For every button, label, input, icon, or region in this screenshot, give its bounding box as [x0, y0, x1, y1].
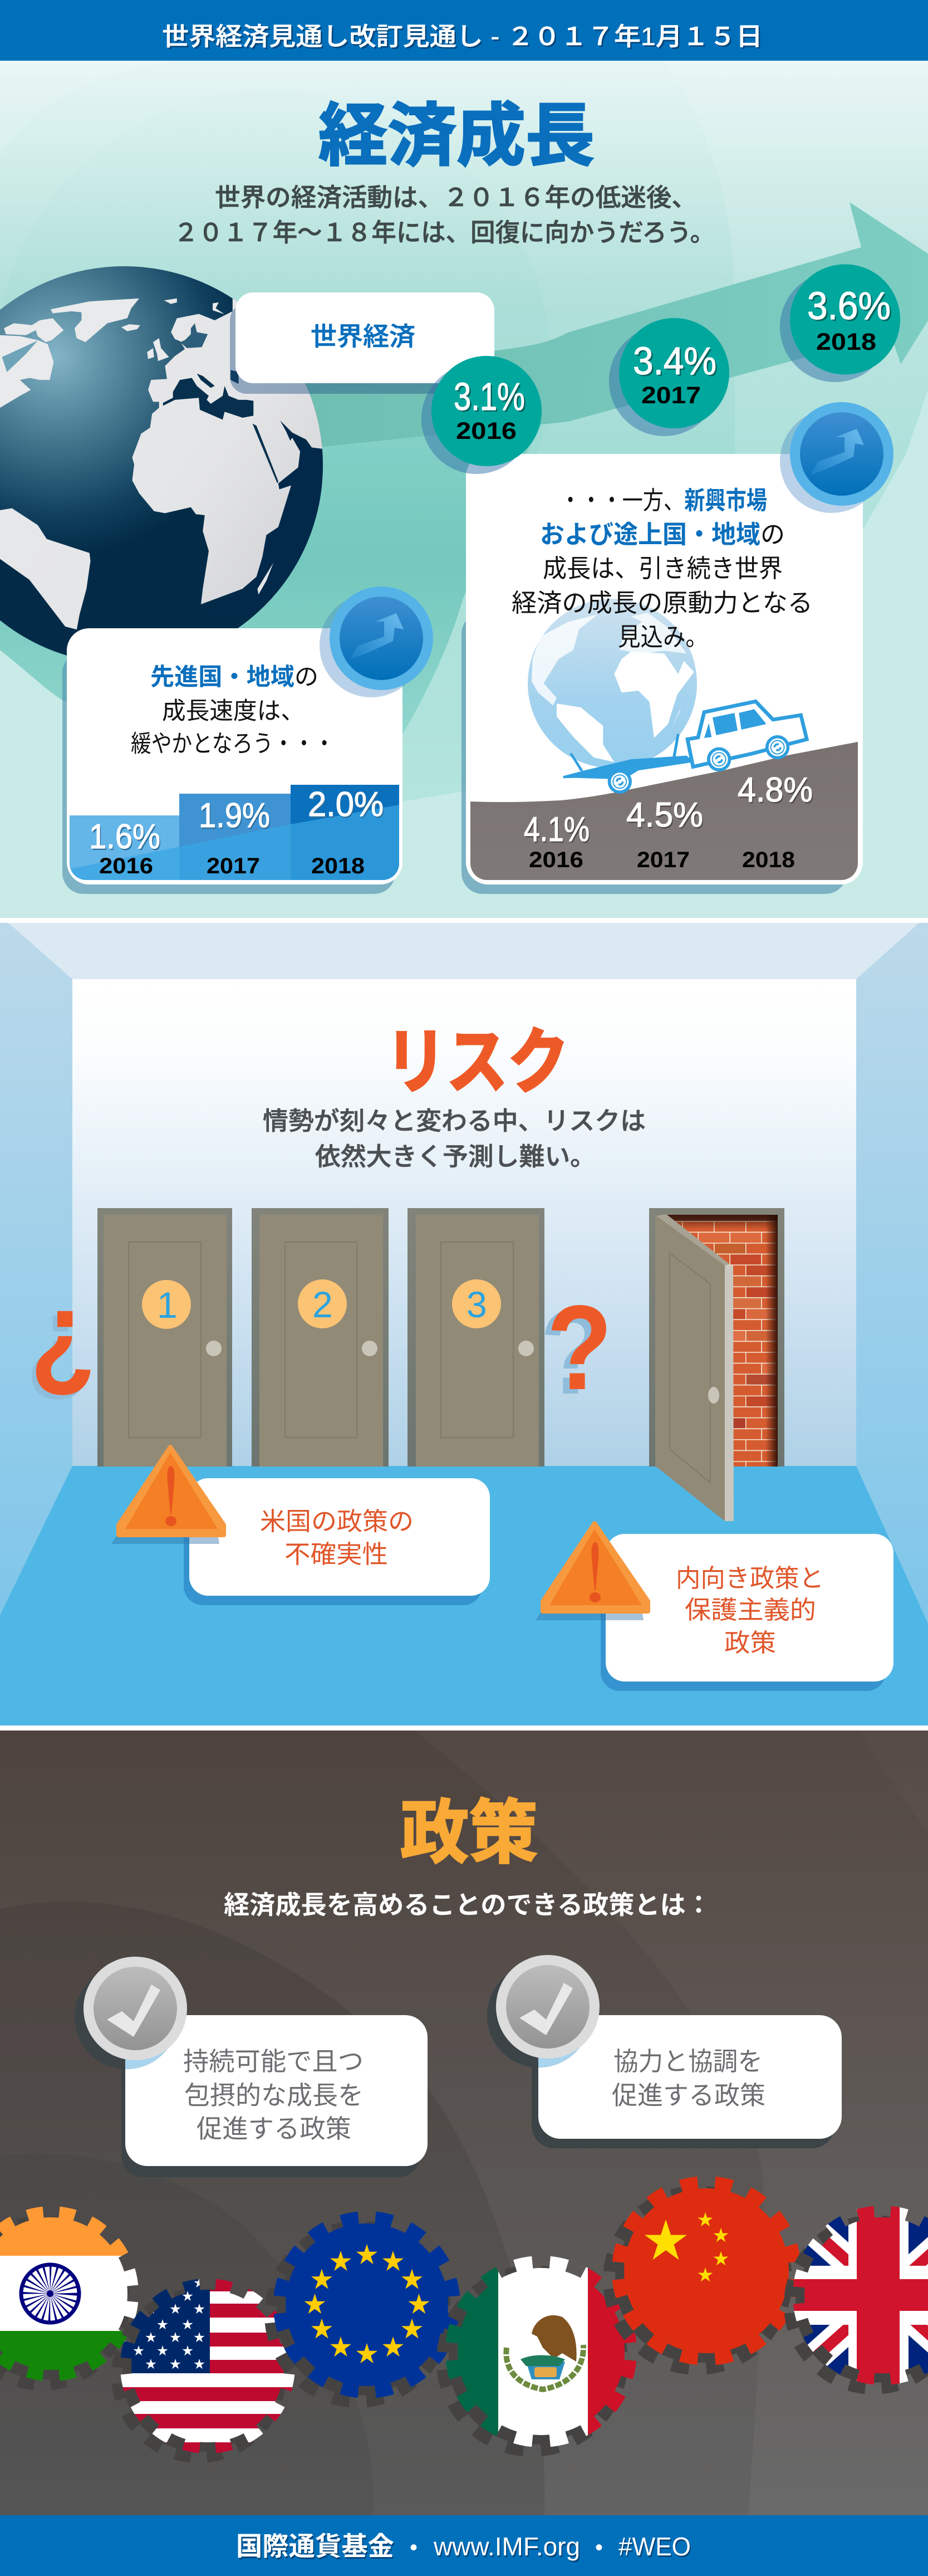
values: emerging growth: 4.5% [627, 798, 704, 836]
callout card: protectionism: 政策 [724, 1629, 776, 1657]
footer bar [0, 2515, 928, 2576]
panel: advanced economies: 2017 [207, 854, 260, 878]
callout: 2018 world growth: 3.6% [807, 284, 891, 328]
header bar: 世界経済見通し改訂見通し - ２０１７年1月１５日 [162, 22, 763, 51]
callout card: protectionism [601, 1534, 893, 1691]
door 4: open door with brick wall [649, 1208, 784, 1521]
panel: risks [0, 918, 928, 1731]
title: policies: 政策 [400, 1795, 538, 1872]
text: emerging markets: 経済の成長の原動力となる [512, 589, 813, 617]
footer text: #WEO [618, 2532, 691, 2561]
door 2: 2 [312, 1284, 333, 1325]
icon: inverted question mark: ¿ [26, 1270, 91, 1405]
panel: advanced economies: 2.0% [308, 785, 384, 824]
values: emerging growth: 4.8% [738, 771, 813, 809]
gear: Mexico [436, 2256, 637, 2456]
icon: growth arrow badge, advanced [320, 586, 433, 697]
gear: United Kingdom [784, 2206, 928, 2394]
text: emerging markets: および途上国・地域の [540, 520, 785, 549]
callout: 2018 world growth: 3.6% [809, 286, 892, 329]
door 3 [407, 1208, 544, 1467]
card: inclusive growth: 促進する政策 [197, 2114, 351, 2143]
arrow: upward growth [278, 202, 928, 451]
callout: 2016 world growth: 3.1% [455, 377, 527, 420]
panel: advanced economies: 2016 [99, 854, 153, 878]
panel: advanced economies [62, 628, 402, 894]
icon: warning cone 2 [536, 1523, 648, 1620]
panel: economic growth [0, 0, 928, 918]
header bar [0, 0, 928, 61]
footer text: www.IMF.org [434, 2534, 581, 2563]
subtitle: policies: 経済成長を高めることのできる政策とは： [224, 1890, 711, 1919]
callout card: US policy uncertainty [184, 1478, 490, 1605]
values: emerging growth: 2016 [529, 848, 583, 872]
door 3: 3 [467, 1284, 487, 1325]
values: emerging growth: 4.1% [525, 812, 591, 850]
text: advanced economies: 成長速度は、 [162, 698, 305, 725]
icon: question mark: ? [540, 1284, 606, 1419]
callout card: US policy uncertainty: 米国の政策の [260, 1507, 414, 1536]
icon: question mark: ? [547, 1280, 612, 1415]
callout card: US policy uncertainty: 不確実性 [284, 1540, 388, 1568]
values: emerging growth: 2017 [637, 848, 690, 872]
callout card: protectionism: 内向き政策と [676, 1564, 824, 1592]
card: cooperation: 促進する政策 [612, 2081, 765, 2110]
card: inclusive growth [121, 2015, 428, 2177]
subtitle: 世界の経済活動は、２０１６年の低迷後、 [215, 183, 697, 212]
values: emerging growth: 2018 [742, 848, 795, 872]
text: emerging markets: 見込み。 [618, 623, 708, 651]
card: cooperation [532, 2015, 842, 2148]
panel: advanced economies: 2.0% [309, 787, 385, 825]
gear: China [603, 2177, 799, 2374]
icon: check badge 2 [487, 1955, 600, 2067]
values: emerging growth: 4.8% [739, 773, 814, 811]
subtitle: ２０１７年～１８年には、回復に向かうだろう。 [174, 218, 715, 247]
card: inclusive growth: 持続可能で且つ [183, 2047, 364, 2076]
callout: 2018 world growth [780, 264, 900, 382]
text: emerging markets: ・・・一方、新興市場 [560, 486, 767, 515]
footer text: #WEO [620, 2534, 692, 2563]
footer text: • [595, 2535, 603, 2560]
door 1: 1 [157, 1284, 178, 1326]
text: emerging markets [512, 486, 813, 651]
panel: emerging markets [461, 454, 863, 894]
values: emerging growth [524, 771, 814, 872]
label card: world economy [230, 292, 494, 394]
callout: 2017 world growth [609, 318, 729, 436]
footer text [236, 2531, 692, 2563]
header bar: 世界経済見通し改訂見通し - ２０１７年1月１５日 [164, 24, 764, 52]
subtitle [174, 183, 715, 247]
text: advanced economies: 先進国・地域の [150, 664, 318, 691]
illustration: globe [0, 266, 328, 664]
card: inclusive growth: 包摂的な成長を [184, 2081, 364, 2110]
panel: advanced economies: 2018 [311, 854, 365, 878]
card: cooperation: 協力と協調を [613, 2047, 763, 2076]
subtitle: risks: 依然大きく予測し難い。 [315, 1142, 596, 1171]
callout: 2016 world growth [421, 356, 542, 474]
footer text: www.IMF.org [433, 2532, 580, 2561]
callout: 2018 world growth: 2018 [816, 329, 876, 355]
gear: United States [112, 2279, 295, 2462]
callout: 2017 world growth: 3.4% [633, 339, 716, 383]
callout: 2016 world growth: 3.1% [454, 375, 525, 418]
icon: inverted question mark: ¿ [30, 1265, 96, 1400]
callout: 2016 world growth: 2016 [456, 418, 517, 444]
panel: advanced economies: 1.6% [89, 818, 160, 856]
bar chart: advanced growth [70, 785, 399, 880]
text: advanced economies [131, 664, 335, 757]
illustration: car towing globe [563, 701, 807, 794]
panel: advanced economies: 1.9% [199, 796, 270, 835]
title: risks: リスク [385, 1023, 569, 1102]
icon: growth arrow badge, emerging [780, 402, 893, 513]
callout: 2017 world growth: 3.4% [635, 341, 718, 384]
gear: European Union [265, 2211, 460, 2407]
illustration: light globe [528, 599, 697, 768]
door 1 [97, 1208, 232, 1467]
values: emerging growth: 4.1% [524, 810, 590, 849]
values: emerging growth: 4.5% [626, 796, 703, 834]
icon: warning cone 1 [111, 1447, 224, 1544]
gear: India [0, 2207, 138, 2390]
label card: world economy: 世界経済 [311, 322, 415, 351]
footer text: 国際通貨基金 [236, 2531, 394, 2561]
subtitle: risks [263, 1107, 646, 1171]
panel: advanced economies: 1.9% [200, 798, 271, 837]
callout: 2017 world growth: 2017 [641, 382, 701, 409]
footer text: • [410, 2535, 418, 2560]
icon: check badge 1 [75, 1957, 187, 2069]
footer text: 国際通貨基金 [237, 2533, 395, 2563]
text: advanced economies: 緩やかとなろう・・・ [131, 731, 335, 757]
panel: policies [0, 1731, 928, 2515]
subtitle: risks: 情勢が刻々と変わる中、リスクは [263, 1107, 646, 1135]
callout card: protectionism: 保護主義的 [685, 1596, 816, 1624]
title: economic growth: 経済成長 [318, 98, 595, 174]
door 2 [252, 1208, 389, 1467]
text: emerging markets: 成長は、引き続き世界 [543, 554, 783, 583]
panel: advanced economies: 1.6% [90, 819, 161, 858]
illustration: ground slope [470, 742, 858, 880]
